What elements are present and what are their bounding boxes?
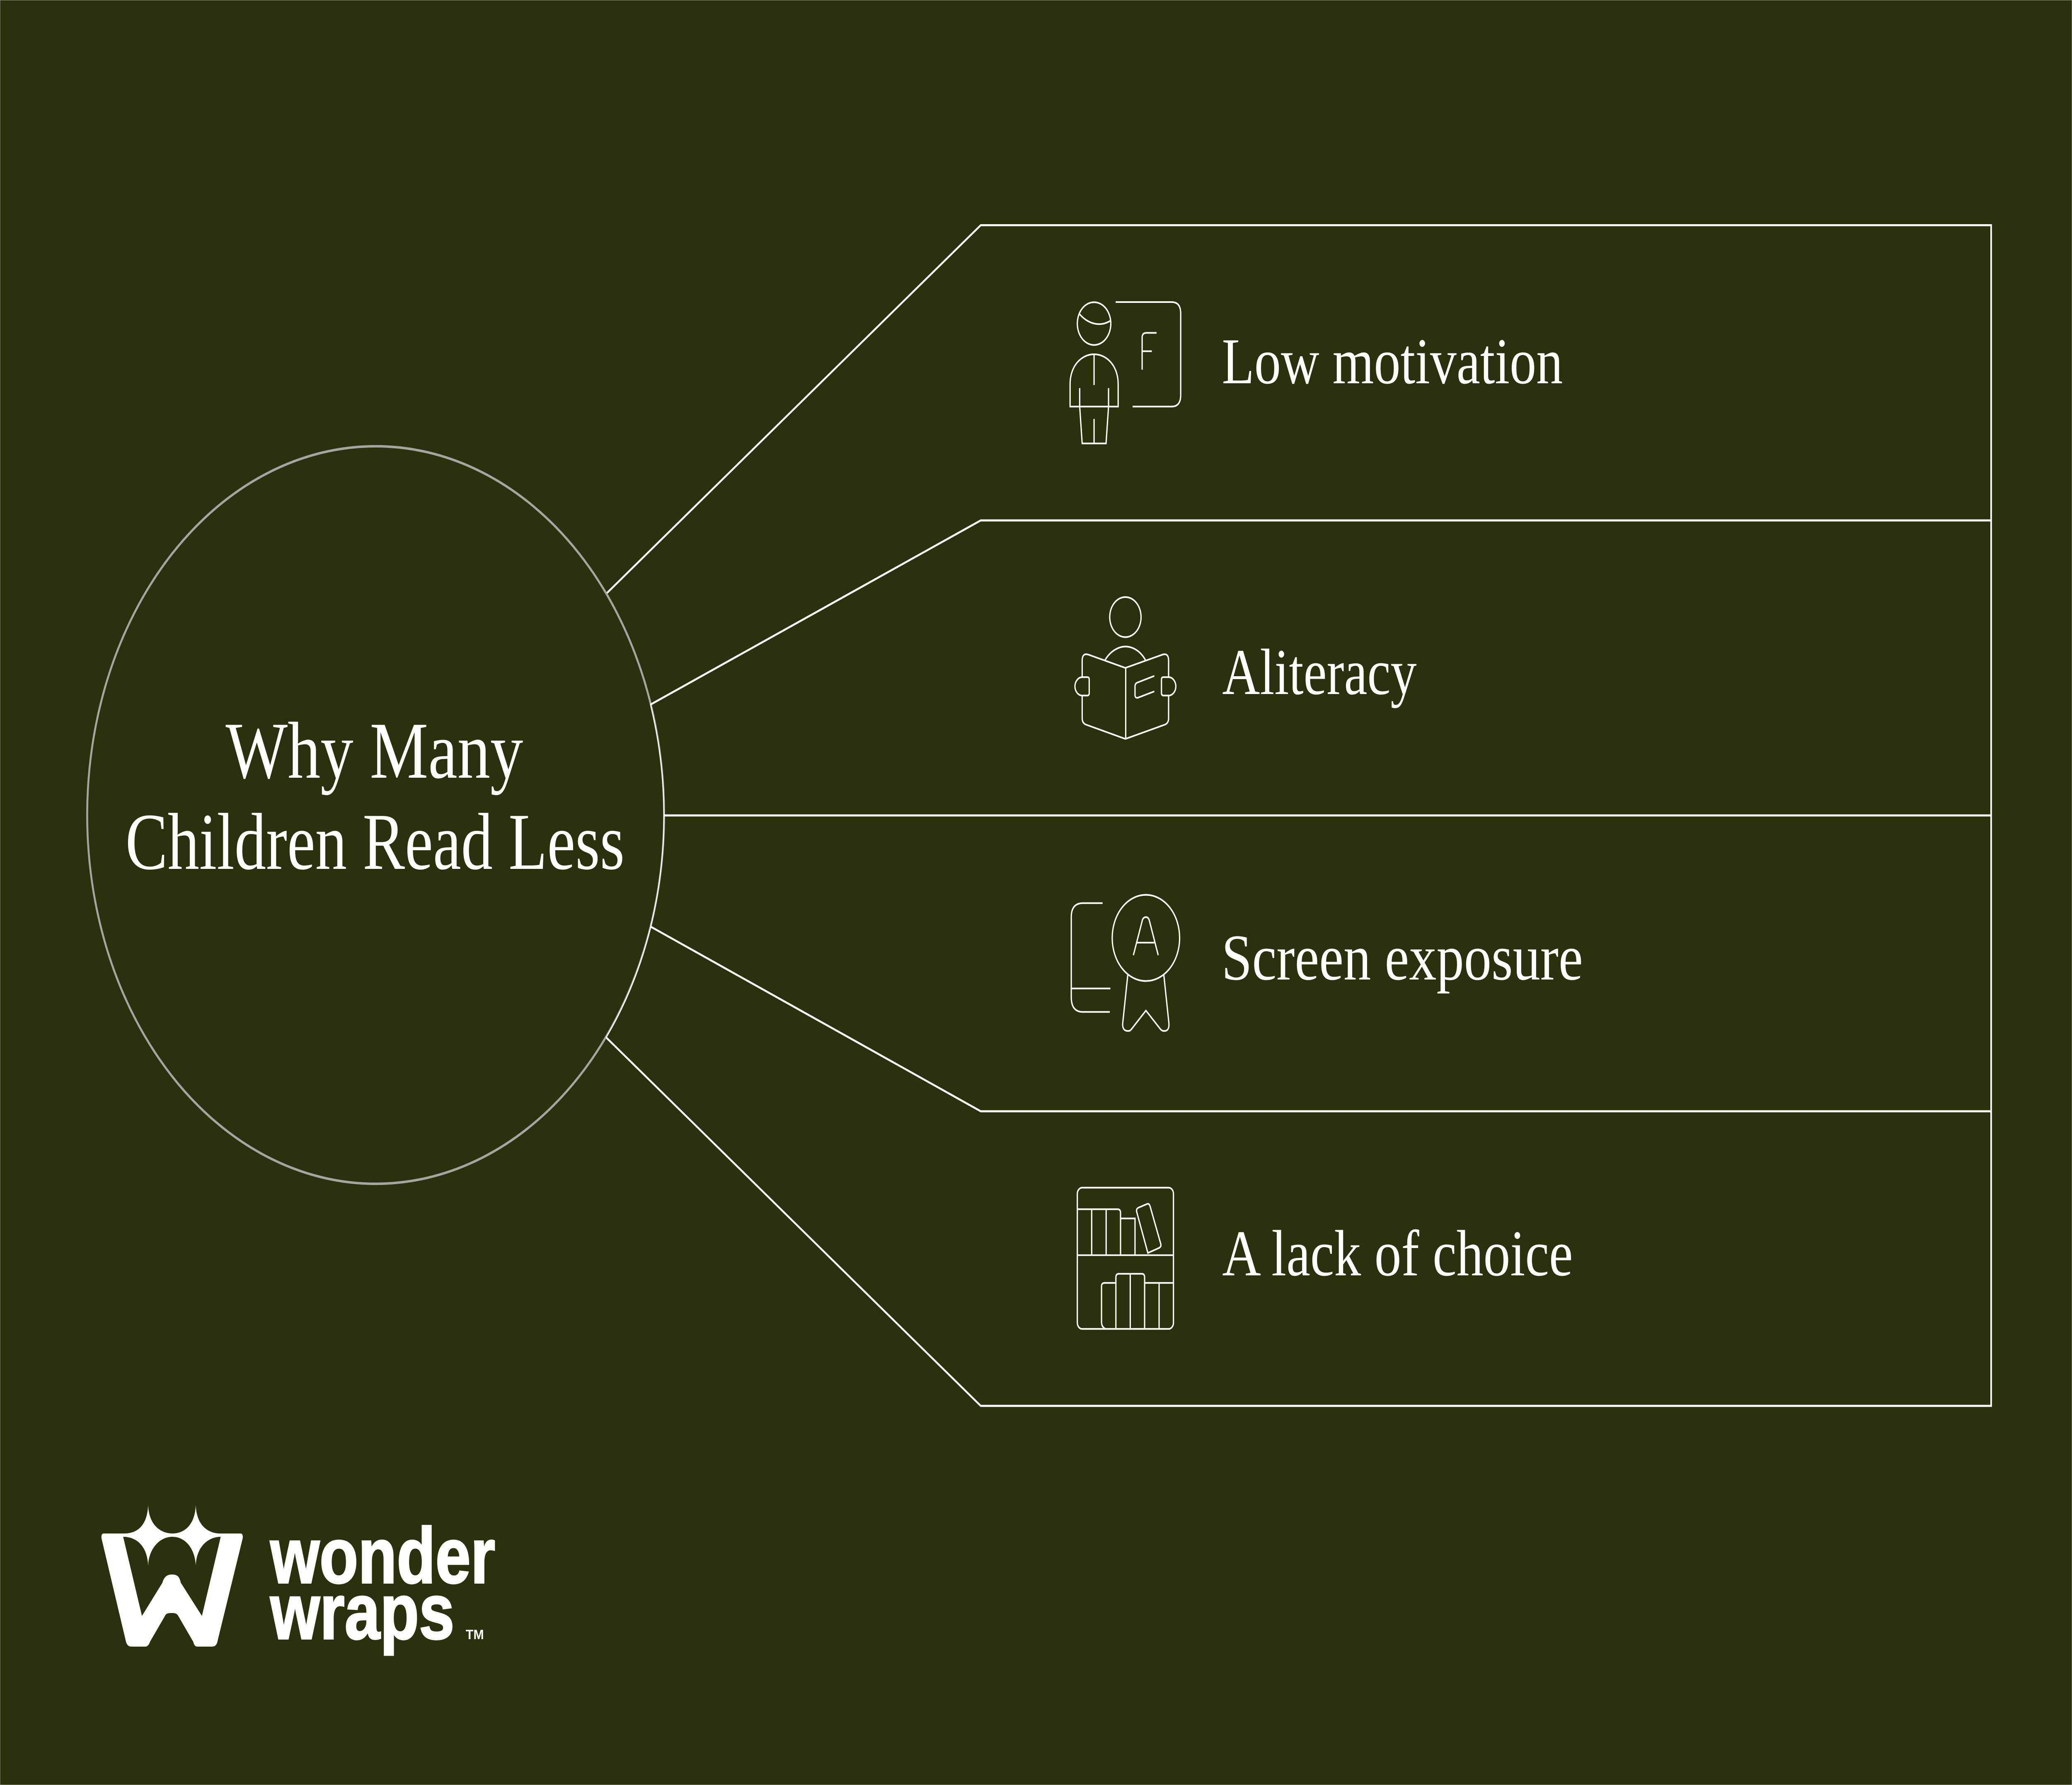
panel: aliteracy — [651, 520, 1991, 815]
panel outline and connector — [651, 520, 1991, 815]
wordmark: wonder — [270, 1512, 495, 1600]
icon: student with board — [1070, 302, 1181, 443]
panel: a lack of choice — [606, 1038, 1991, 1406]
panel: screen exposure — [651, 815, 1991, 1111]
label: Low motivation — [1222, 325, 1563, 398]
logo: wonder wraps — [102, 1505, 495, 1656]
panel outline and connector — [651, 815, 1991, 1111]
panel: central topic circle — [87, 446, 664, 1184]
title — [126, 706, 625, 886]
circle outline — [87, 446, 664, 1184]
icon: person reading book — [1075, 597, 1176, 739]
title: Why Many — [225, 706, 523, 795]
label: Aliteracy — [1222, 636, 1417, 709]
panel outline and connector — [606, 1038, 1991, 1406]
wordmark — [270, 1512, 495, 1656]
wordmark: TM — [466, 1628, 484, 1642]
label: Screen exposure — [1222, 922, 1583, 994]
wordmark: wraps — [270, 1568, 455, 1656]
panel: low motivation — [607, 225, 1991, 593]
highlighted arc of circle — [606, 704, 664, 1038]
label: A lack of choice — [1222, 1217, 1573, 1290]
icon: W mark with stars — [102, 1505, 243, 1647]
icon: bookshelf — [1077, 1188, 1174, 1329]
panel outline and connector — [607, 225, 1991, 593]
icon: book and award ribbon — [1071, 895, 1180, 1031]
title: Children Read Less — [126, 797, 625, 886]
